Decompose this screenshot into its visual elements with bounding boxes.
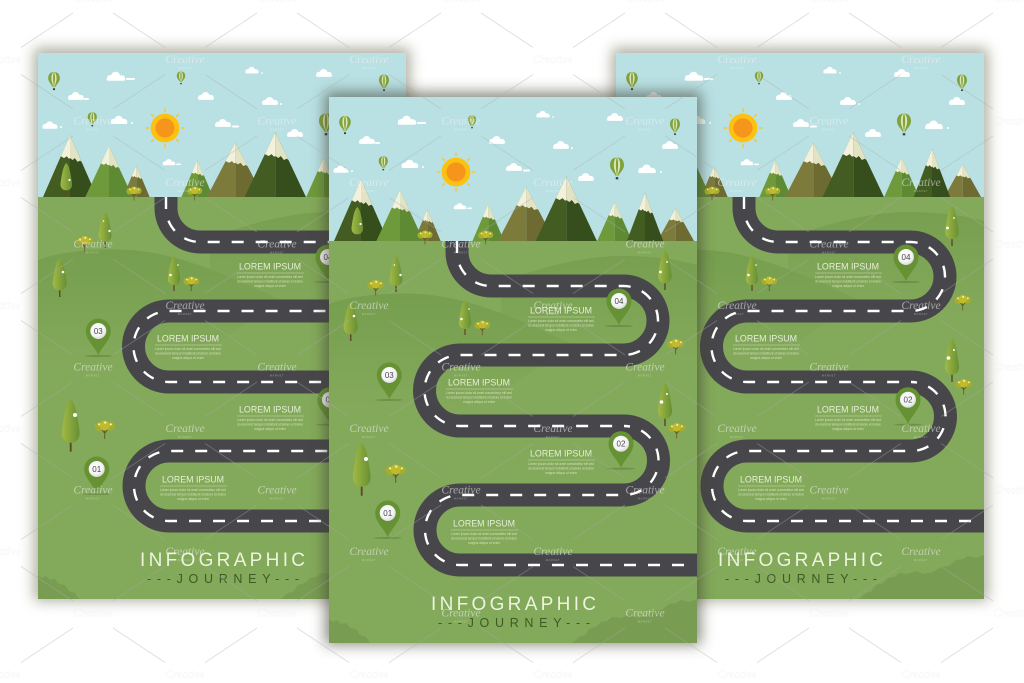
text block 01: Lorem ipsum dolor sit amet consectetur elit sed bbox=[160, 488, 226, 492]
meadow bbox=[38, 197, 406, 599]
clouds bbox=[42, 67, 387, 165]
text block 04: Lorem ipsum dolor sit amet consectetur elit sed bbox=[815, 275, 881, 279]
yellow bushes bbox=[367, 231, 685, 483]
text block 04: do eiusmod tempor incididunt ut labore et dolore bbox=[237, 280, 303, 284]
text block 01: Lorem ipsum dolor sit amet consectetur elit sed bbox=[451, 532, 517, 536]
text block 03: do eiusmod tempor incididunt ut labore et dolore bbox=[155, 352, 221, 356]
icon: sun bbox=[724, 108, 762, 148]
text block 01 bbox=[451, 518, 518, 545]
subtitle: ---JOURNEY--- bbox=[147, 572, 299, 586]
text block 02: LOREM IPSUM bbox=[239, 404, 301, 416]
text block 01: do eiusmod tempor incididunt ut labore et dolore bbox=[451, 536, 517, 540]
panel: left poster bbox=[34, 48, 410, 601]
text block 02: LOREM IPSUM bbox=[817, 404, 879, 416]
pin 02: 02 bbox=[904, 396, 913, 405]
text block 03: magna aliqua ut enim bbox=[172, 356, 204, 360]
pin 04 bbox=[314, 244, 342, 283]
mountain range bbox=[43, 132, 403, 197]
text block 04: magna aliqua ut enim bbox=[254, 284, 286, 288]
text block 04: magna aliqua ut enim bbox=[832, 284, 864, 288]
text block 04 bbox=[528, 306, 595, 332]
winding road bbox=[134, 197, 406, 521]
text block 03 bbox=[733, 334, 800, 360]
title: INFOGRAPHIC bbox=[140, 550, 305, 571]
text block 02: do eiusmod tempor incididunt ut labore et dolore bbox=[815, 422, 881, 426]
panel: right poster bbox=[612, 48, 988, 601]
text block 02: Lorem ipsum dolor sit amet consectetur elit sed bbox=[237, 418, 303, 422]
text block 01: LOREM IPSUM bbox=[453, 518, 515, 530]
text block 04 bbox=[815, 262, 882, 288]
corner foliage bbox=[38, 555, 406, 599]
pin 01: 01 bbox=[670, 465, 680, 474]
mountain range bbox=[334, 176, 694, 241]
meadow bbox=[616, 197, 984, 599]
title: INFOGRAPHIC bbox=[718, 550, 883, 571]
text block 01 bbox=[160, 474, 227, 501]
pin 04: 04 bbox=[902, 253, 911, 262]
text block 01: LOREM IPSUM bbox=[162, 474, 224, 486]
text block 04: Lorem ipsum dolor sit amet consectetur elit sed bbox=[237, 275, 303, 279]
text block 03: magna aliqua ut enim bbox=[750, 356, 782, 360]
pin 02: 02 bbox=[326, 396, 335, 405]
icon: sun bbox=[146, 108, 184, 148]
rolling hills bbox=[329, 256, 697, 407]
pin 01 bbox=[83, 456, 111, 495]
hot air balloons bbox=[339, 116, 680, 179]
rolling hills bbox=[38, 212, 406, 363]
pin 04 bbox=[605, 288, 633, 327]
clouds bbox=[333, 111, 678, 209]
text block 03: do eiusmod tempor incididunt ut labore et dolore bbox=[733, 352, 799, 356]
text block 02 bbox=[815, 404, 882, 431]
text block 03 bbox=[155, 334, 222, 360]
pin 01: 01 bbox=[92, 465, 102, 474]
trees bbox=[53, 163, 381, 452]
pin 03 bbox=[84, 318, 112, 357]
clouds bbox=[620, 67, 965, 165]
text block 01: magna aliqua ut enim bbox=[468, 541, 500, 545]
pin 03: 03 bbox=[94, 327, 103, 336]
text block 04 bbox=[237, 262, 304, 288]
text block 04: do eiusmod tempor incididunt ut labore et dolore bbox=[528, 324, 594, 328]
text block 02 bbox=[237, 404, 304, 431]
pin 01 bbox=[661, 456, 689, 495]
rolling hills bbox=[616, 212, 984, 363]
text block 03 bbox=[446, 378, 513, 404]
winding road bbox=[712, 197, 984, 521]
trees bbox=[344, 207, 672, 496]
title: INFOGRAPHIC bbox=[431, 594, 596, 615]
pin 03 bbox=[662, 318, 690, 357]
text block 04: magna aliqua ut enim bbox=[545, 328, 577, 332]
pin 02 bbox=[316, 387, 344, 426]
text block 02: magna aliqua ut enim bbox=[832, 427, 864, 431]
sky bbox=[329, 97, 697, 241]
trees bbox=[631, 163, 959, 452]
text block 03: Lorem ipsum dolor sit amet consectetur elit sed bbox=[733, 347, 799, 351]
text block 04: LOREM IPSUM bbox=[817, 262, 879, 272]
subtitle: ---JOURNEY--- bbox=[725, 572, 877, 586]
yellow bushes bbox=[654, 187, 972, 439]
text block 01: do eiusmod tempor incididunt ut labore et dolore bbox=[160, 492, 226, 496]
pin 04: 04 bbox=[615, 297, 624, 306]
text block 02: Lorem ipsum dolor sit amet consectetur elit sed bbox=[528, 462, 594, 466]
hot air balloons bbox=[48, 72, 389, 135]
text block 01: do eiusmod tempor incididunt ut labore et dolore bbox=[738, 492, 804, 496]
hot air balloons bbox=[626, 72, 967, 135]
text block 04: Lorem ipsum dolor sit amet consectetur elit sed bbox=[528, 319, 594, 323]
corner foliage bbox=[329, 599, 697, 643]
text block 02: Lorem ipsum dolor sit amet consectetur elit sed bbox=[815, 418, 881, 422]
pin 04 bbox=[892, 244, 920, 283]
text block 02: magna aliqua ut enim bbox=[254, 427, 286, 431]
text block 01: magna aliqua ut enim bbox=[177, 497, 209, 501]
text block 01: LOREM IPSUM bbox=[740, 474, 802, 486]
pin 01: 01 bbox=[383, 509, 393, 518]
sky bbox=[38, 53, 406, 197]
winding road bbox=[424, 241, 697, 565]
pin 03: 03 bbox=[672, 327, 681, 336]
text block 01: magna aliqua ut enim bbox=[755, 497, 787, 501]
mountain range bbox=[621, 132, 981, 197]
pin 02: 02 bbox=[617, 440, 626, 449]
pin 03 bbox=[375, 362, 403, 401]
panel: center poster bbox=[325, 92, 701, 645]
pin 01 bbox=[374, 500, 402, 539]
subtitle: ---JOURNEY--- bbox=[438, 616, 590, 630]
text block 01: Lorem ipsum dolor sit amet consectetur elit sed bbox=[738, 488, 804, 492]
pin 02 bbox=[607, 431, 635, 470]
text block 02: LOREM IPSUM bbox=[530, 448, 592, 460]
yellow bushes bbox=[76, 187, 394, 439]
icon: sun bbox=[436, 152, 476, 192]
text block 04: LOREM IPSUM bbox=[530, 306, 592, 316]
pin 04: 04 bbox=[324, 253, 333, 262]
text block 02 bbox=[528, 448, 595, 475]
text block 02: magna aliqua ut enim bbox=[545, 471, 577, 475]
text block 03: Lorem ipsum dolor sit amet consectetur elit sed bbox=[446, 391, 512, 395]
text block 03: LOREM IPSUM bbox=[157, 334, 219, 344]
text block 04: do eiusmod tempor incididunt ut labore et dolore bbox=[815, 280, 881, 284]
text block 03: do eiusmod tempor incididunt ut labore et dolore bbox=[446, 396, 512, 400]
text block 02: do eiusmod tempor incididunt ut labore et dolore bbox=[237, 422, 303, 426]
text block 03: LOREM IPSUM bbox=[448, 378, 510, 388]
text block 03: LOREM IPSUM bbox=[735, 334, 797, 344]
text block 03: magna aliqua ut enim bbox=[463, 400, 495, 404]
sky bbox=[616, 53, 984, 197]
text block 04: LOREM IPSUM bbox=[239, 262, 301, 272]
text block 01 bbox=[738, 474, 805, 501]
meadow bbox=[329, 241, 697, 643]
text block 02: do eiusmod tempor incididunt ut labore et dolore bbox=[528, 466, 594, 470]
text block 03: Lorem ipsum dolor sit amet consectetur elit sed bbox=[155, 347, 221, 351]
corner foliage bbox=[616, 555, 984, 599]
pin 02 bbox=[894, 387, 922, 426]
pin 03: 03 bbox=[385, 371, 394, 380]
